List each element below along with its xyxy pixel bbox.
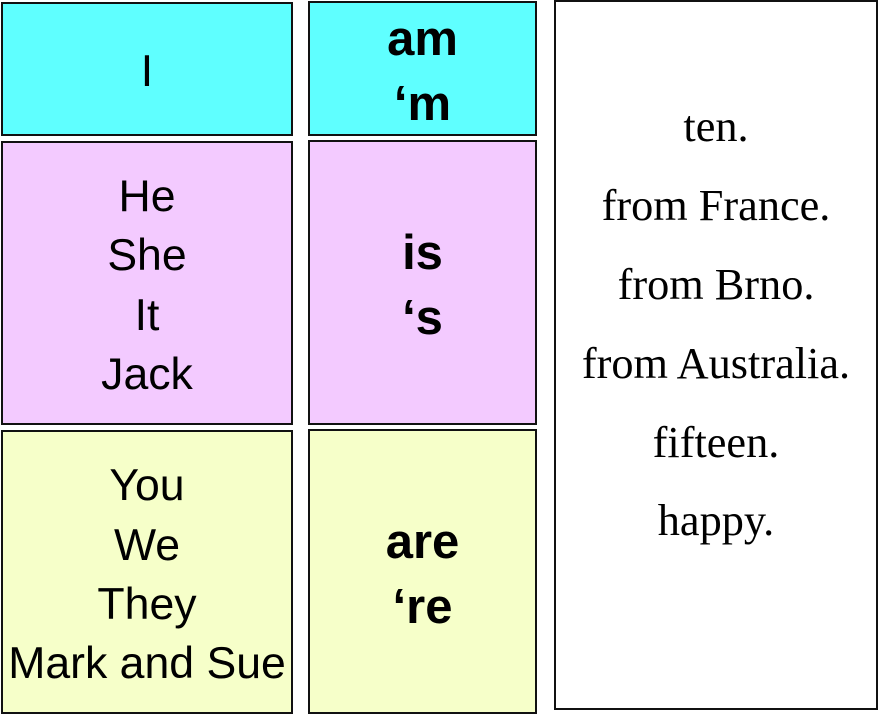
text: He She It Jack: She	[107, 231, 187, 280]
text: You We They Mark and Sue: They	[97, 580, 197, 629]
text: He She It Jack: He	[118, 172, 176, 221]
text: are 're: ‘re	[393, 580, 452, 634]
text: complements list: ten.	[683, 102, 749, 151]
text: are 're	[386, 515, 459, 634]
text: complements list: happy.	[658, 496, 774, 545]
text: am 'm: ‘m	[394, 77, 451, 131]
text: is 's: ‘s	[402, 291, 443, 345]
text: You We They Mark and Sue: You	[109, 461, 185, 510]
text: is 's: is	[402, 226, 443, 280]
panel: verb is	[308, 140, 537, 425]
text: He She It Jack: It	[135, 291, 159, 340]
panel: verb am	[308, 1, 537, 136]
text: complements list: from France.	[602, 181, 830, 230]
panel: subject I	[1, 2, 293, 136]
text: He She It Jack: Jack	[101, 350, 193, 399]
text: complements list	[582, 102, 850, 545]
text: am 'm	[387, 12, 458, 131]
text: complements list: fifteen.	[653, 418, 779, 467]
text: am 'm: am	[387, 12, 458, 66]
text: is 's	[402, 226, 443, 345]
text: complements list: from Australia.	[582, 339, 850, 388]
panel: verb are	[308, 429, 537, 714]
text: are 're: are	[386, 515, 459, 569]
text: You We They Mark and Sue: We	[114, 521, 180, 570]
text: You We They Mark and Sue: Mark and Sue	[8, 639, 286, 688]
text: complements list: from Brno.	[618, 260, 814, 309]
text: I: I	[141, 47, 153, 96]
text: You We They Mark and Sue	[8, 461, 286, 688]
panel: subjects you we they mark and sue	[1, 430, 293, 714]
text: He She It Jack	[101, 172, 193, 399]
panel: subjects he she it jack	[1, 141, 293, 425]
panel: complements	[554, 0, 878, 710]
